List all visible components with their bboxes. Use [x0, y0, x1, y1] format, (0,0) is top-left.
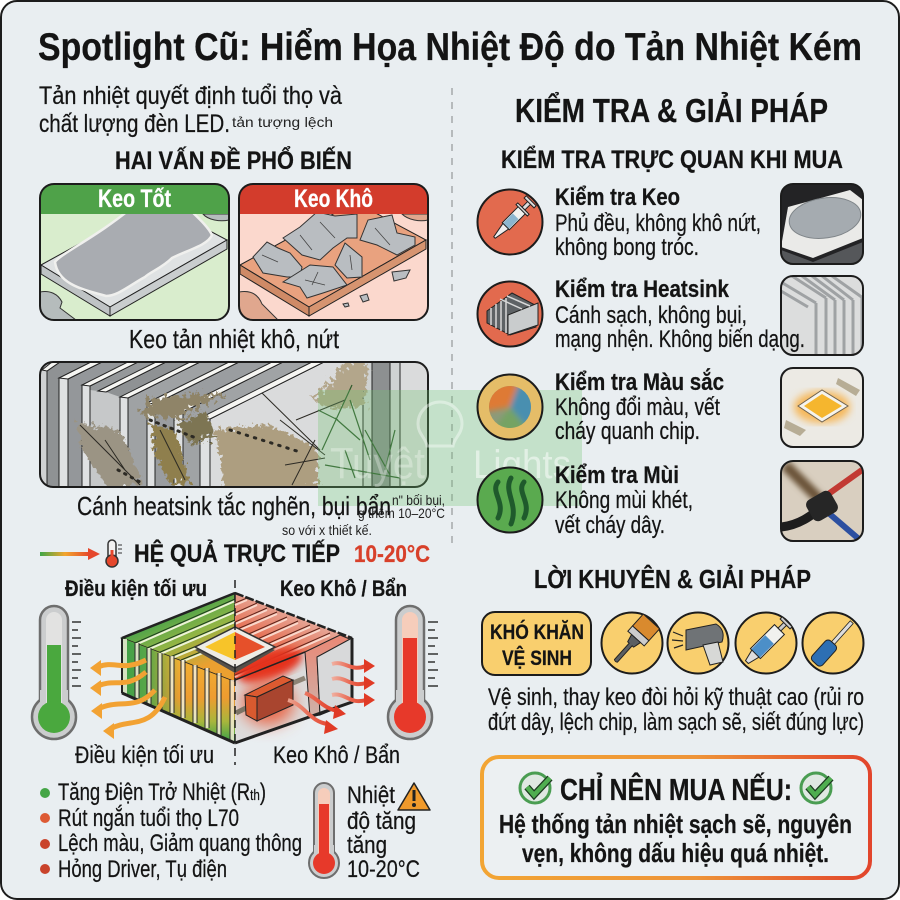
label: good paste: Keo Tốt [98, 185, 172, 213]
watermark: Tuyệt [330, 439, 425, 488]
panel: dry thermal paste [239, 184, 428, 320]
label: dry or dirty top: Keo Khô / Bẩn [280, 576, 407, 601]
check item: paste: Kiểm tra Keo [555, 184, 680, 211]
check item: paste: Phủ đều, không khô nứt, [555, 210, 761, 237]
callout: buy only if: CHỈ NÊN MUA NẾU: [560, 771, 792, 807]
photo: paste on chip [781, 184, 863, 264]
right half: hot fins [234, 593, 352, 743]
check item: colour: Không đổi màu, vết [555, 394, 720, 421]
photo: burnt wires [781, 461, 863, 541]
check item: smell: Kiểm tra Mùi [555, 462, 679, 489]
icon: small thermometer [106, 540, 122, 567]
check item: smell: vết cháy dây. [555, 512, 665, 539]
label: optimal conditions top: Điều kiện tối ưu [65, 576, 207, 601]
check item: colour [478, 368, 724, 445]
icon: gradient arrow [40, 548, 100, 560]
text: cleaning note [488, 684, 864, 736]
text: temperature rise note: Nhiệt [347, 782, 395, 809]
icon: heat gun [668, 612, 728, 674]
arrows: hot airflow [288, 659, 375, 734]
check item: colour: Kiểm tra Màu sắc [555, 368, 724, 396]
icon: brush [602, 612, 662, 674]
thermometer: hot [388, 606, 438, 739]
icon: colour wheel [478, 374, 542, 440]
photo: LED chip [781, 368, 863, 447]
icon: check left [520, 773, 550, 803]
heading value: temperature rise: 10-20°C [354, 541, 430, 568]
watermark: Lights [473, 443, 571, 487]
photo: clogged heatsink fins [40, 362, 430, 490]
caption: clogged heatsink: Cánh heatsink tắc nghẽn, bụi bẩn [77, 491, 391, 521]
icon: warning triangle [398, 783, 430, 810]
heading: two common problems: HAI VẤN ĐỀ PHỔ BIẾN [115, 145, 352, 175]
left half: cool fins [122, 593, 235, 743]
overlapping small note [282, 492, 445, 538]
check item: paste: không bong tróc. [555, 234, 699, 261]
heading: direct consequences: HỆ QUẢ TRỰC TIẾP [134, 538, 340, 568]
text: temperature rise note: độ tăng [347, 808, 416, 835]
check item: smell [478, 462, 693, 539]
label: dry or dirty bottom: Keo Khô / Bẩn [273, 742, 400, 769]
text: temperature rise note [347, 782, 420, 883]
text: temperature rise note: tăng [347, 832, 387, 859]
icon: heatsink [478, 282, 542, 346]
check item: heatsink: Cánh sạch, không bụi, [555, 302, 747, 329]
label: optimal conditions bottom: Điều kiện tối ưu [75, 742, 214, 769]
caption: dry paste: Keo tản nhiệt khô, nứt [129, 324, 340, 354]
label: dry paste: Keo Khô [294, 185, 373, 213]
thermometer: temperature rise [309, 783, 339, 878]
list: consequences: Hỏng Driver, Tụ điện [58, 856, 227, 883]
badge: hard to clean: KHÓ KHĂN [490, 620, 584, 644]
check item: colour: cháy quanh chip. [555, 418, 700, 445]
overlapping small note: n" bối bụi, [392, 492, 445, 508]
column divider [451, 88, 453, 545]
heading: check and solutions: KIỂM TRA & GIẢI PHÁP [515, 92, 828, 129]
arrows: cool airflow [90, 660, 165, 739]
photo: clean heatsink [781, 276, 863, 355]
check item: heatsink [478, 276, 747, 346]
heatsink split diagram [122, 580, 352, 765]
icon: check right [801, 773, 831, 803]
icon: syringe [478, 190, 542, 254]
watermark [318, 390, 582, 506]
icon: paste syringe [736, 612, 796, 674]
text: temperature rise note: 10-20°C [347, 856, 420, 883]
overlapping small note: g thêm 10–20°C [358, 505, 445, 521]
list: consequences: Tăng Điện Trở Nhiệt (Rth) [58, 779, 266, 806]
icon: screwdriver [802, 612, 864, 674]
thermometer: optimal [32, 606, 81, 739]
check item: heatsink: Kiểm tra Heatsink [555, 276, 730, 303]
callout: buy only if [482, 757, 870, 878]
intro text: Tản nhiệt quyết định tuổi thọ và [39, 82, 342, 110]
intro text [39, 82, 342, 138]
badge: hard to clean: VỆ SINH [502, 646, 572, 670]
intro text: chất lượng đèn LED. [39, 110, 230, 138]
callout: buy only if: vẹn, không dấu hiệu quá nhiệt. [522, 838, 829, 868]
icon: smell waves [478, 468, 542, 532]
text: heatsink check overflow line: mạng nhện. Không biến dạng. [555, 326, 805, 353]
heading: visual check: KIỂM TRA TRỰC QUAN KHI MUA [501, 145, 843, 174]
intro text: tản tượng lệch [232, 114, 333, 130]
heading: advice and solutions: LỜI KHUYÊN & GIẢI PHÁP [534, 564, 811, 594]
LED chip [195, 627, 275, 673]
panel: good thermal paste [40, 184, 229, 320]
check item: smell: Không mùi khét, [555, 487, 693, 514]
overlapping small note: so với x thiết kế. [282, 522, 372, 538]
list: consequences [40, 779, 302, 883]
list: consequences: Lệch màu, Giảm quang thông [58, 830, 302, 857]
badge: hard to clean [482, 612, 591, 675]
check item: paste [478, 184, 761, 261]
list: consequences: Rút ngắn tuổi thọ L70 [58, 805, 239, 832]
